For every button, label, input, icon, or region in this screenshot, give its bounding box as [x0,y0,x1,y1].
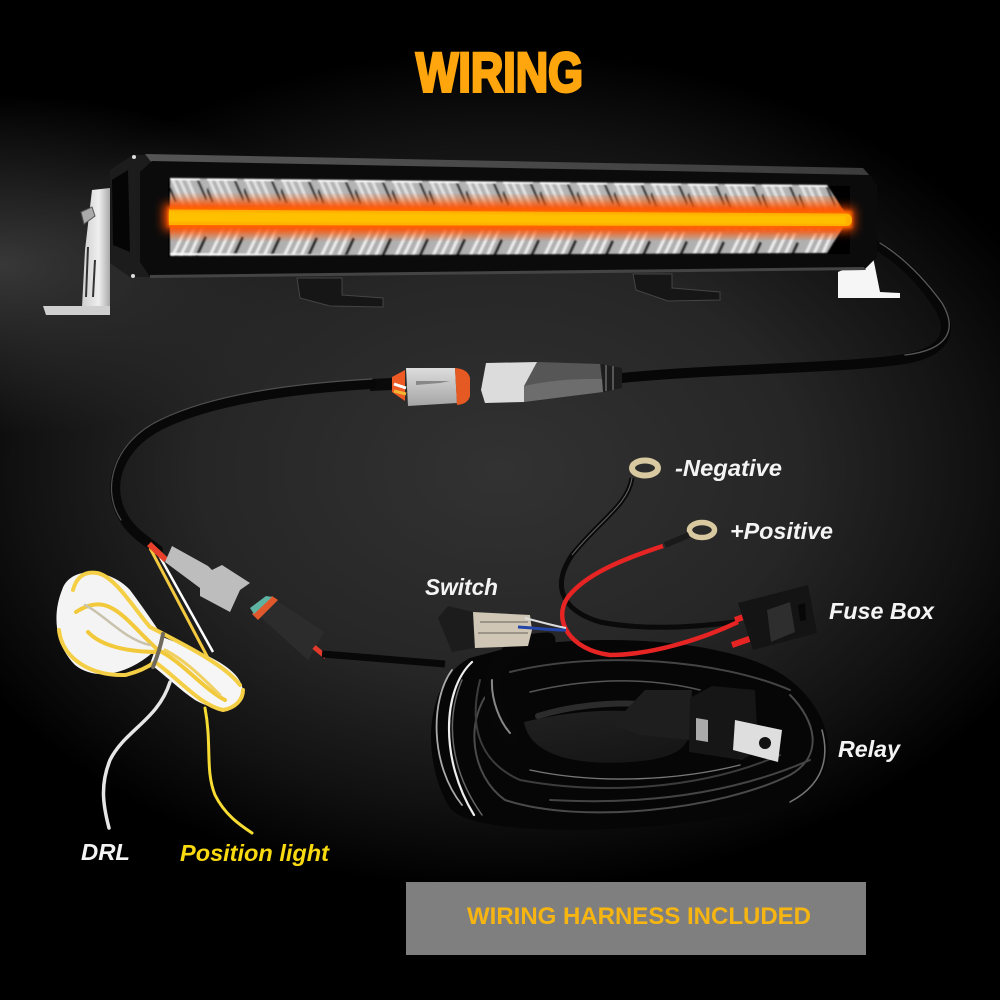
DRL wire [103,682,170,828]
light bar [110,154,877,278]
switch [438,606,566,652]
connector: gray plug [165,546,250,612]
mounting tab [733,720,782,762]
label: negative: -Negative [675,455,782,481]
label: position light: Position light [180,840,330,866]
light strip [169,210,852,226]
screws [132,155,136,159]
upper orange glow [170,192,845,213]
coiled DRL and position wires [56,572,243,710]
LED window [168,178,850,257]
label: positive: +Positive [730,518,833,544]
cable: socket to harness [322,654,445,664]
label: DRL: DRL [81,839,130,865]
connector: socket with orange seal [370,368,470,406]
banner: WIRING HARNESS INCLUDED [467,903,811,930]
position light wire [205,708,252,833]
light strip glow [164,204,854,231]
cable: connector to switch pigtail [112,379,372,550]
left bracket [43,188,110,315]
right bracket [838,257,900,298]
mounting foot right [633,274,720,301]
upper LEDs [170,178,845,213]
label: fuse box: Fuse Box [829,598,935,624]
mounting foot left [297,278,383,307]
wiring harness coil [431,640,828,830]
label: switch: Switch [425,574,498,600]
relay [612,686,782,762]
harness inner loop [492,640,548,738]
lower orange glow [170,224,845,242]
negative ring terminal [561,460,735,627]
cable: bar to connector [622,243,949,378]
front face [140,161,877,277]
positive ring terminal [562,522,738,655]
housing top [145,154,870,176]
title: WIRING [416,40,583,104]
label: relay: Relay [838,736,902,762]
wire: yellow and white to coil [150,548,208,658]
connector: plug with sleeve [481,362,622,403]
banner [406,882,866,955]
fuse box [732,585,817,650]
end cap [110,155,152,277]
lower LEDs [170,224,845,256]
connector: black socket [250,596,326,660]
